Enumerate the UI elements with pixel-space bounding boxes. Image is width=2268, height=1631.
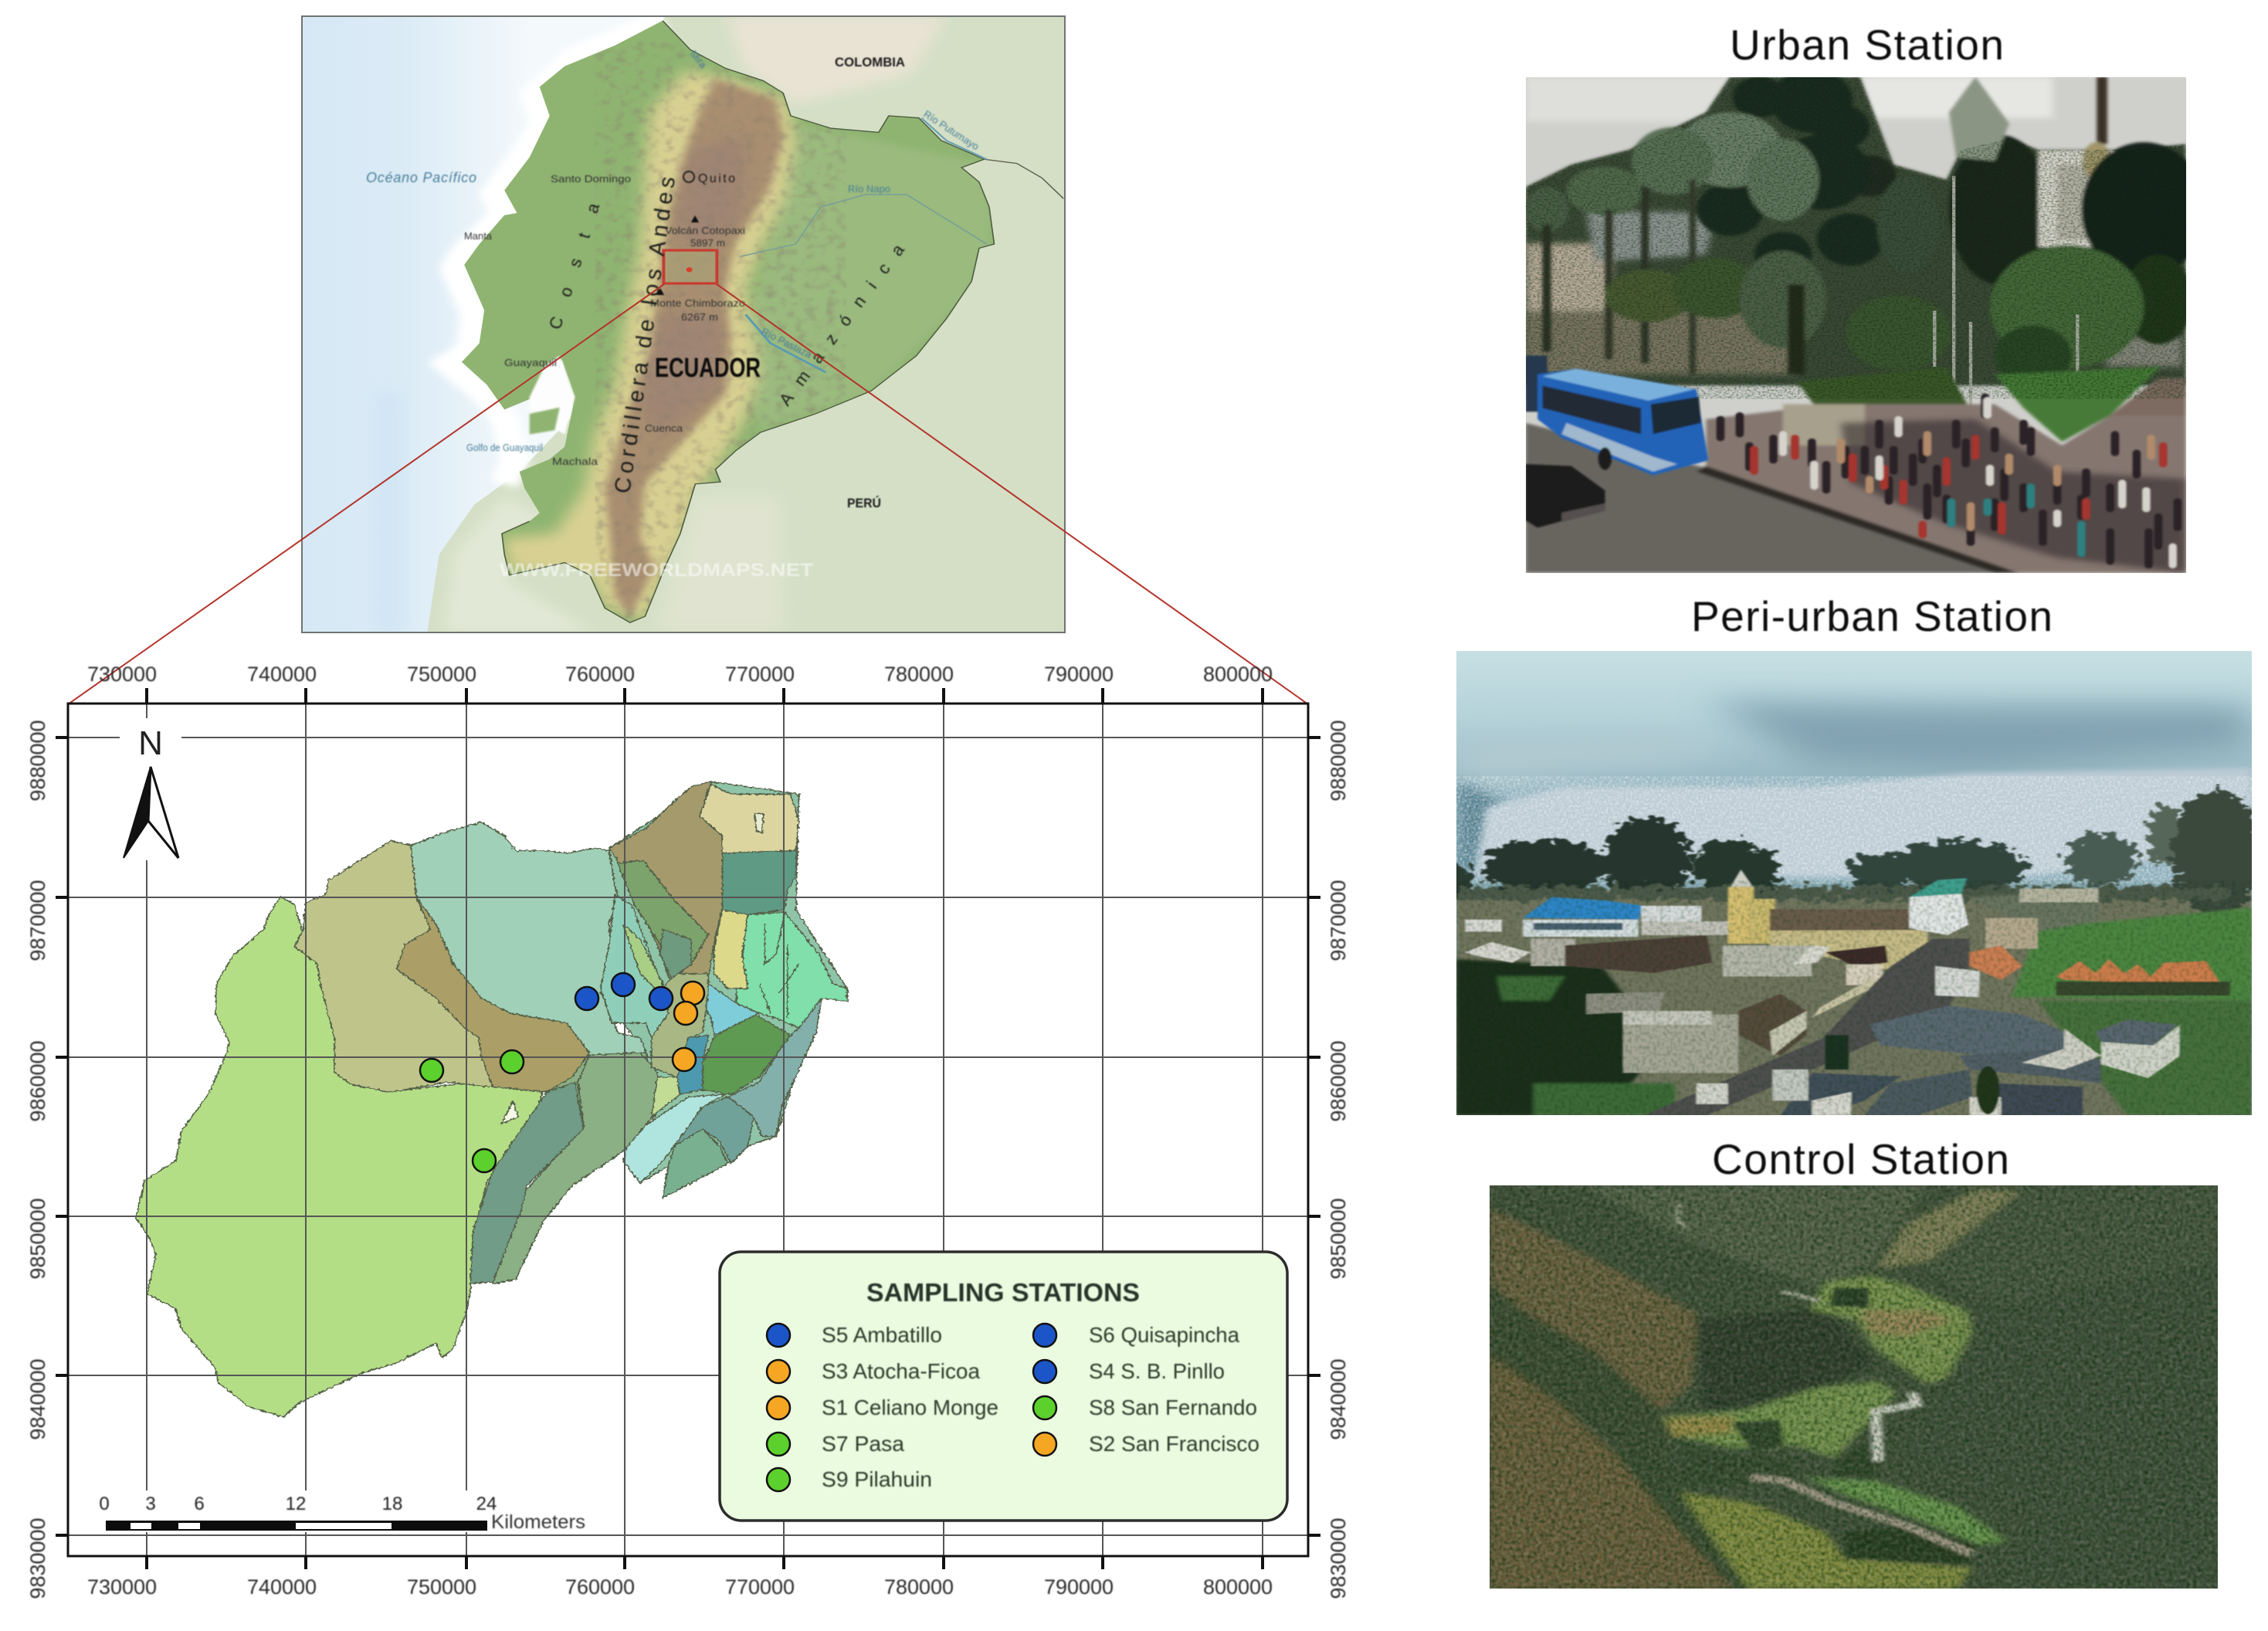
legend: sampling stations: S1 Celiano Monge (822, 1395, 998, 1419)
right axis labels: 9870000 (1327, 880, 1350, 961)
heading: urban station: Urban Station (1730, 21, 2004, 69)
photo: control station (1490, 1185, 2218, 1589)
left axis labels: 9880000 (26, 720, 49, 802)
left axis labels: 9870000 (26, 880, 49, 961)
map labels: Río Napo (848, 183, 890, 195)
bottom axis labels: 770000 (725, 1575, 795, 1599)
graticule grid (68, 702, 1308, 1556)
legend: sampling stations: S7 Pasa (822, 1432, 904, 1456)
map labels: Santo Domingo (551, 173, 631, 185)
scale bar (93, 1490, 585, 1533)
scale bar: 18 (382, 1494, 402, 1514)
pickup (1526, 464, 1605, 527)
map labels: Machala (552, 456, 598, 467)
scale bar: 24 (476, 1494, 497, 1514)
right axis labels: 9880000 (1327, 720, 1350, 802)
left axis labels: 9830000 (26, 1517, 49, 1599)
top axis labels: 730000 (87, 663, 157, 686)
map labels: 6267 m (681, 311, 718, 323)
map labels: Manta (464, 230, 493, 242)
north arrow: N (138, 724, 163, 762)
left axis labels: 9840000 (26, 1358, 49, 1440)
heading: peri-urban station: Peri-urban Station (1691, 592, 2053, 640)
top axis labels: 780000 (884, 663, 954, 686)
map labels: 5897 m (690, 237, 725, 249)
left axis labels: 9850000 (26, 1198, 49, 1280)
photo: urban station (1526, 70, 2206, 573)
right axis labels: 9860000 (1327, 1040, 1350, 1122)
map labels: Golfo de Guayaquil (466, 442, 543, 453)
photo: peri-urban station (1446, 651, 2261, 1117)
map labels: Volcán Cotopaxi (665, 225, 745, 236)
left axis labels (26, 720, 49, 1599)
map labels: COLOMBIA (835, 55, 905, 70)
heading: control station: Control Station (1712, 1135, 2009, 1183)
map labels: A m a z ó n i c a (775, 240, 908, 409)
map frame (56, 688, 1320, 1569)
top axis labels: 790000 (1044, 663, 1114, 686)
bottom axis labels: 740000 (247, 1575, 317, 1599)
legend: sampling stations: S9 Pilahuin (822, 1467, 932, 1491)
inset locator box (663, 250, 717, 283)
legend: sampling stations: S3 Atocha-Ficoa (822, 1359, 980, 1383)
map labels (366, 48, 981, 581)
legend: sampling stations: SAMPLING STATIONS (866, 1278, 1140, 1307)
right axis labels: 9840000 (1327, 1358, 1350, 1440)
scale bar: 3 (145, 1494, 156, 1514)
top axis labels: 800000 (1203, 663, 1273, 686)
map labels: Río Pastaza (760, 325, 814, 361)
map labels: Quito (698, 172, 735, 185)
top axis labels: 760000 (565, 663, 635, 686)
map labels: C o s t a (545, 200, 603, 332)
north arrow (120, 718, 181, 860)
legend: sampling stations: S8 San Fernando (1089, 1395, 1257, 1419)
map labels: WWW.FREEWORLDMAPS.NET (500, 560, 813, 581)
scale bar: 12 (286, 1494, 306, 1514)
right axis labels: 9850000 (1327, 1198, 1350, 1280)
scale bar: 0 (99, 1494, 110, 1514)
legend: sampling stations (720, 1252, 1287, 1521)
panel: study area map (26, 663, 1350, 1599)
bottom axis labels: 760000 (565, 1575, 635, 1599)
legend: sampling stations: S5 Ambatillo (822, 1323, 942, 1347)
bottom axis labels: 750000 (407, 1575, 476, 1599)
top axis labels: 770000 (725, 663, 795, 686)
scale bar: 6 (194, 1494, 205, 1514)
zoom connector lines (68, 284, 1308, 704)
legend: sampling stations: S4 S. B. Pinllo (1089, 1359, 1225, 1383)
map labels: Guayaquil (504, 357, 557, 368)
bottom axis labels: 800000 (1203, 1575, 1273, 1599)
map labels: Río Putumayo (921, 108, 981, 152)
top axis labels (87, 663, 1273, 686)
top axis labels: 750000 (407, 663, 476, 686)
watershed polygons (136, 782, 847, 1417)
bottom axis labels: 780000 (884, 1575, 954, 1599)
map labels: Cuenca (645, 422, 683, 434)
map labels: ECUADOR (655, 353, 761, 383)
top axis labels: 740000 (247, 663, 317, 686)
bottom axis labels (87, 1575, 1273, 1599)
map labels: PERÚ (847, 496, 881, 510)
bottom axis labels: 790000 (1044, 1575, 1114, 1599)
map labels: Cordillera de los Andes (610, 175, 680, 495)
map labels: Mira (688, 48, 710, 71)
map labels: Monte Chimborazo (650, 297, 745, 309)
map labels: Océano Pacífico (366, 170, 476, 185)
right axis labels (1327, 720, 1350, 1599)
panel: Ecuador overview map (293, 0, 1081, 649)
right axis labels: 9830000 (1327, 1517, 1350, 1599)
bottom axis labels: 730000 (87, 1575, 157, 1599)
legend: sampling stations: S2 San Francisco (1089, 1432, 1259, 1456)
bus (1526, 355, 1708, 476)
crowd (1720, 397, 2185, 573)
scale bar: Kilometers (491, 1511, 585, 1533)
station markers (420, 973, 704, 1172)
left axis labels: 9860000 (26, 1040, 49, 1122)
legend: sampling stations: S6 Quisapincha (1089, 1323, 1239, 1347)
